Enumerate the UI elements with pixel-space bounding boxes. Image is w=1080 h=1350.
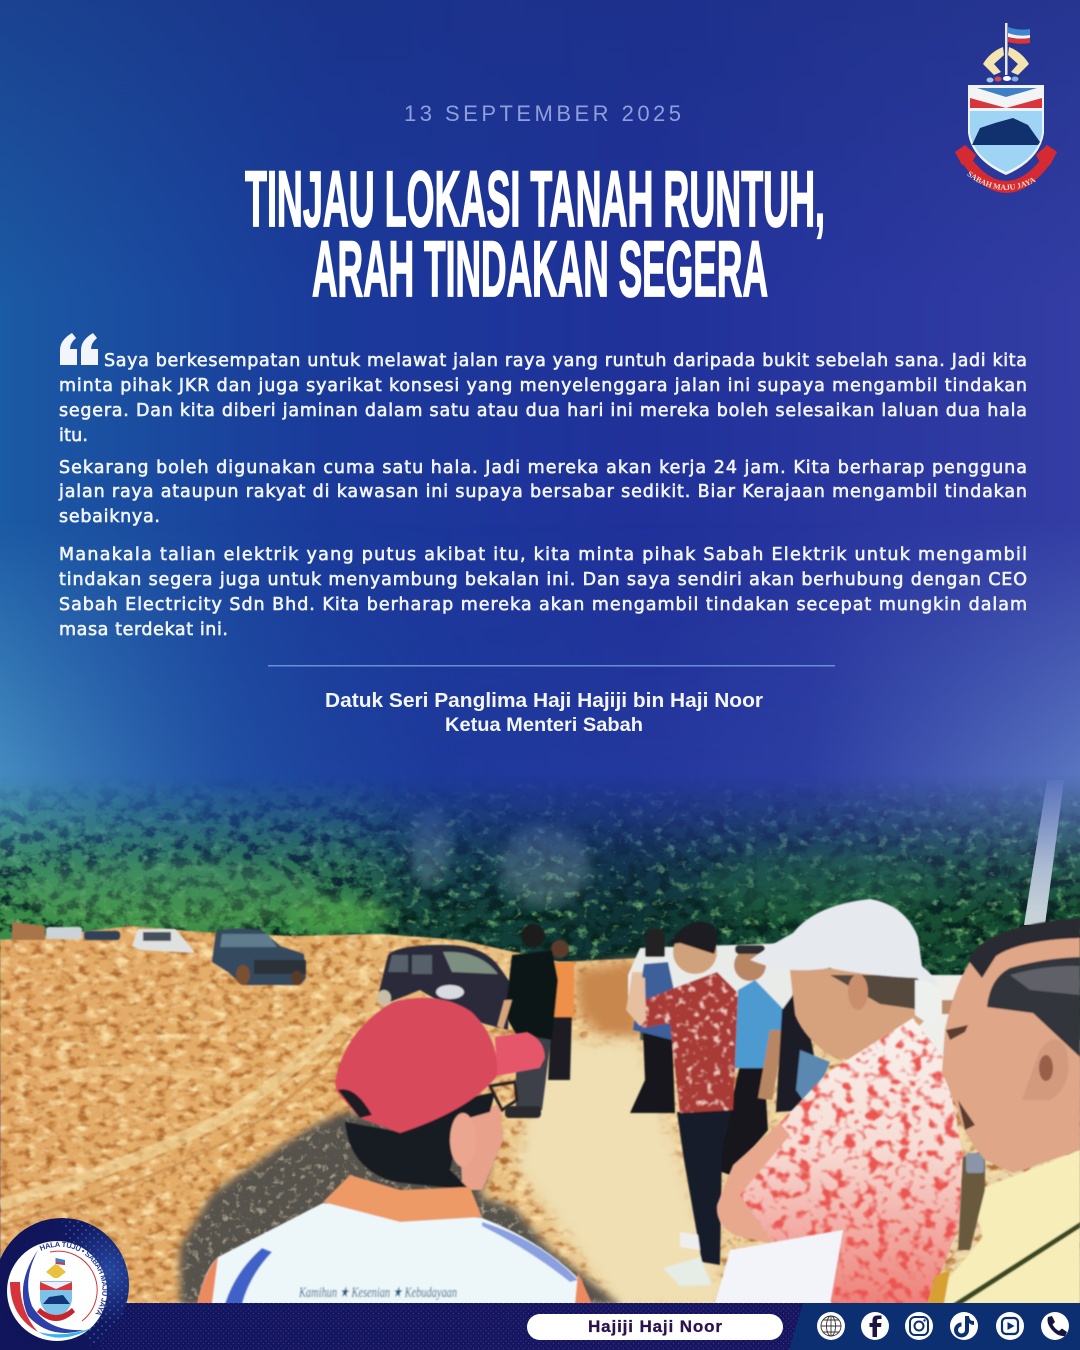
icon: facebook: [861, 1312, 889, 1340]
blue SUV: [212, 928, 306, 985]
icon: instagram: [905, 1312, 933, 1340]
quote paragraph 3: masa terdekat ini.: [59, 620, 228, 640]
speaker name and position: Ketua Menteri Sabah: [445, 715, 643, 736]
icon: Sabah coat of arms: [955, 23, 1057, 193]
man in the far background: [938, 977, 972, 1014]
badge: Hala Tuju Sabah Maju Jaya: [0, 1218, 129, 1346]
quote paragraph 1: [59, 351, 1027, 446]
swoosh: [10, 1250, 92, 1338]
yellow shirt: [927, 1150, 1080, 1304]
ear: [1022, 1039, 1068, 1100]
dark hatchback: [377, 945, 510, 1030]
shirt script text: Kamihun ★ Kesenian ★ Kebudayaan: [298, 1285, 457, 1301]
background: blue gradient panel: [0, 0, 1080, 896]
quote paragraph 3: Manakala talian elektrik yang putus akibat itu, kita minta pihak Sabah Elektrik untuk mengambil: [59, 545, 1027, 565]
man in blue polo: [716, 945, 830, 1175]
quote paragraph 3: [59, 545, 1027, 640]
quote paragraph 2: jalan raya ataupun rakyat di kawasan ini supaya bersabar sedikit. Biar Kerajaan mengambil tindakan: [58, 482, 1027, 502]
flag on pole: [1005, 23, 1030, 75]
quote paragraph 2: Sekarang boleh digunakan cuma satu hala. Jadi mereka akan kerja 24 jam. Kita berharap pengguna: [59, 458, 1027, 478]
arm: [717, 1123, 790, 1245]
name pill: [527, 1314, 783, 1340]
ribbon with motto: [955, 145, 1057, 193]
polo shirt: [197, 1203, 592, 1304]
hair: [345, 1092, 495, 1190]
bystanders: black shirt man and orange vest worker: [497, 924, 574, 1118]
red cap: [335, 998, 497, 1133]
beads: [986, 76, 1026, 82]
face and head: [942, 925, 1080, 1173]
man in red batik with black cap: [626, 922, 738, 1286]
small coat of arms: [37, 1258, 75, 1321]
badge motto: HALA TUJU • SABAH MAJU JAYA: [40, 1242, 108, 1315]
hair top band: [968, 918, 1080, 978]
hair side patch: [987, 957, 1080, 1057]
white cap: [750, 899, 940, 1000]
brow and mouth shade: [946, 1025, 975, 1130]
landslide soil and road: [0, 926, 1080, 1310]
man on right with yellow uniform: [927, 918, 1080, 1304]
photo: landslide site with officials: [0, 760, 1080, 1310]
arms holding pole: [983, 47, 1029, 75]
brim: [495, 1032, 545, 1076]
radio strap area: [958, 1150, 985, 1250]
quote paragraph 2: [58, 458, 1027, 527]
face: [790, 965, 925, 1065]
neck and side of face: [460, 1105, 503, 1190]
shirt: [733, 1018, 963, 1304]
icon: youtube play: [996, 1312, 1024, 1340]
vehicles queued on soil: [12, 922, 510, 1030]
man with red cap, seen from behind: [197, 998, 592, 1304]
quote paragraph 3: Sabah Electricity Sdn Bhd. Kita berharap mereka akan mengambil tindakan secepat mungkin dalam: [59, 595, 1027, 615]
speaker name and position: [325, 689, 763, 736]
quote paragraph 1: minta pihak JKR dan juga syarikat konsesi yang menyelenggara jalan ini supaya mengambil tindakan: [59, 376, 1027, 396]
shield: [968, 85, 1044, 175]
paper: [715, 1230, 843, 1304]
broken asphalt patch: [180, 1112, 620, 1305]
date: 13 SEPTEMBER 2025: [404, 101, 681, 126]
quote paragraph 3: tindakan segera juga untuk menyambung bekalan ini. Dan saya sendiri akan berhubung dengan CEO: [59, 570, 1027, 590]
icon: phone: [1041, 1312, 1069, 1340]
footer band: [0, 1303, 1080, 1350]
quote paragraph 1: Saya berkesempatan untuk melawat jalan raya yang runtuh daripada bukit sebelah sana. Jadi kita: [104, 351, 1027, 371]
speaker name and position: Datuk Seri Panglima Haji Hajiji bin Haji Noor: [325, 689, 763, 712]
forest hillside: [0, 760, 1080, 1060]
white van and pale background: [628, 943, 800, 1040]
icon: opening quote mark: [60, 333, 98, 365]
camera man: [628, 928, 675, 1113]
name pill: Hajiji Haji Noor: [588, 1317, 722, 1336]
glasses: [490, 1082, 517, 1110]
quote paragraph 2: sebaiknya.: [59, 507, 160, 527]
ribbon with motto: SABAH MAJU JAYA: [967, 172, 1036, 190]
icon: tiktok: [950, 1312, 978, 1340]
title: [245, 154, 825, 313]
group of officials at the rear: [626, 922, 975, 1286]
quote paragraph 1: segera. Dan kita diberi jaminan dalam satu atau dua hari ini mereka boleh selesaikan laluan dua hala: [59, 401, 1027, 421]
icon: web globe: [817, 1312, 845, 1340]
orange collar: [323, 1175, 482, 1222]
man with white cap and red-white batik shirt: [715, 899, 963, 1304]
quote paragraph 1: itu.: [59, 426, 88, 446]
social icons: [817, 1312, 1069, 1340]
